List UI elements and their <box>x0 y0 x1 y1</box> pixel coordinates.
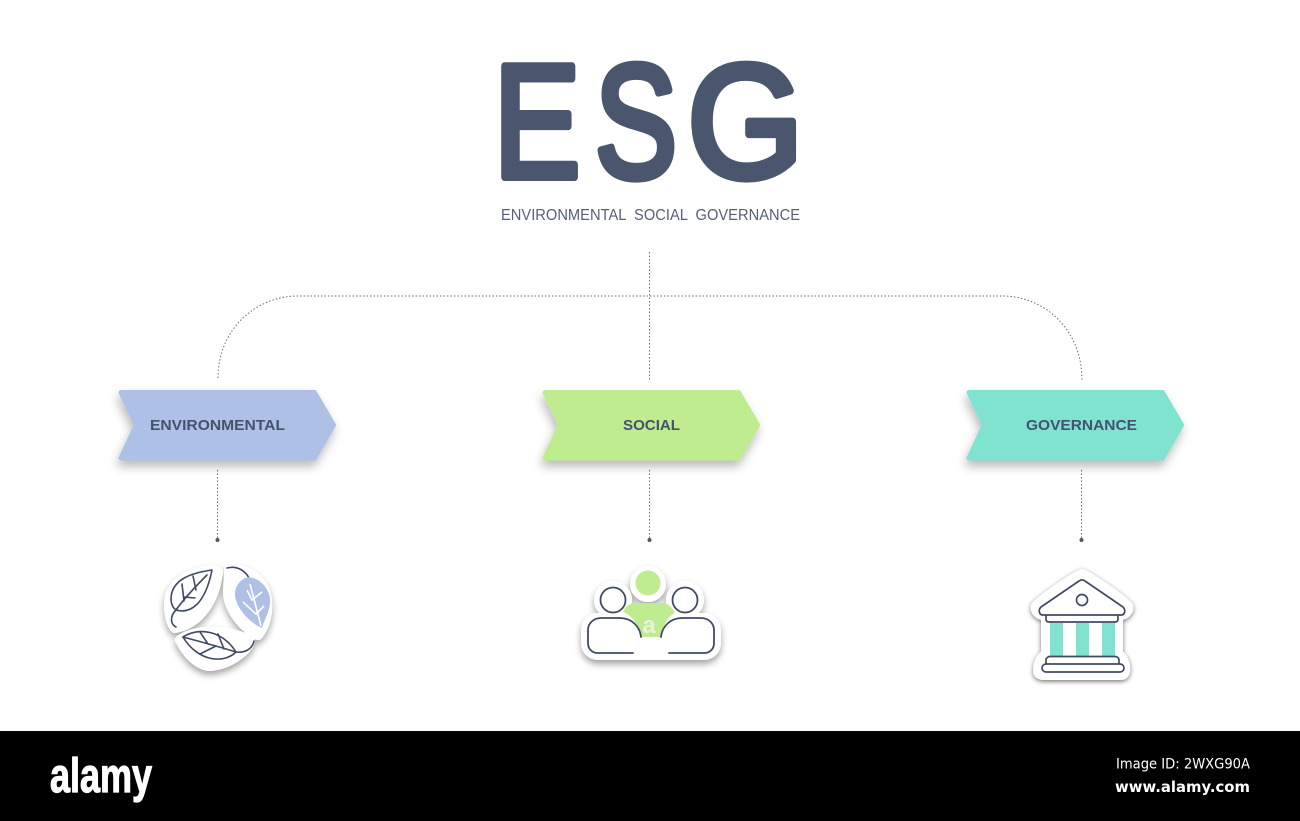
arrow: environmental: ENVIRONMENTAL <box>150 417 285 434</box>
middle person <box>623 570 675 637</box>
title: ESG: S <box>595 32 677 212</box>
side people <box>588 588 714 653</box>
arrow: social <box>545 392 758 458</box>
connector end dots <box>216 538 1084 542</box>
columns <box>1050 623 1115 656</box>
icon: leaves <box>169 567 270 666</box>
arrow: social: SOCIAL <box>623 417 680 434</box>
icon: people <box>586 570 716 655</box>
footer image id: Image ID: 2WXG90A <box>1116 756 1250 772</box>
arrow: governance: GOVERNANCE <box>1026 417 1137 434</box>
title: ESG: G <box>688 32 804 212</box>
icon: bank <box>1032 570 1132 679</box>
arrow: environmental <box>121 392 334 458</box>
footer logo: alamy <box>50 750 152 803</box>
arrow: governance <box>969 392 1182 458</box>
connector lines <box>218 252 1082 538</box>
title: ESG <box>494 32 804 212</box>
subtitle: ENVIRONMENTAL SOCIAL GOVERNANCE <box>501 207 800 224</box>
title: ESG: E <box>494 32 580 212</box>
footer url: www.alamy.com <box>1115 778 1250 796</box>
watermark letter: a <box>642 612 656 639</box>
footer band <box>0 731 1300 821</box>
